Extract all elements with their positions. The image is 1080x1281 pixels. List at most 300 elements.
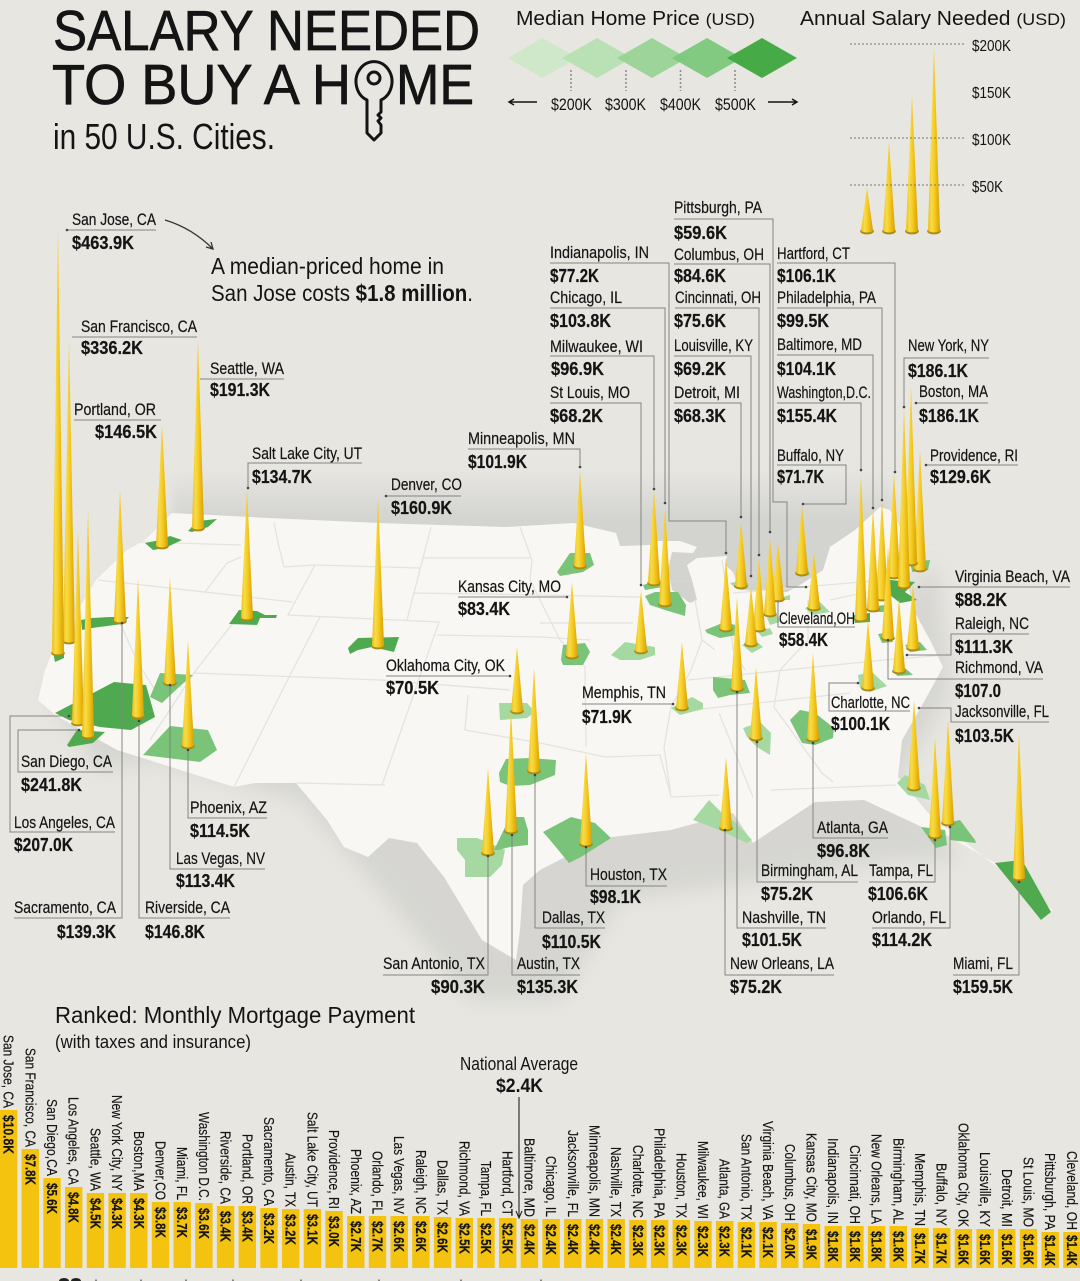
state borders [98,523,945,797]
bar: Riverside: $3.4K [217,1211,234,1242]
label: Chicago: Chicago, IL [550,288,622,307]
label: Seattle: $191.3K [210,380,270,400]
label: Kansas City [458,577,568,619]
label: national average: $2.4K [496,1076,543,1097]
bar: Los Angeles [65,1097,82,1268]
bar: Houston: $2.3K [672,1225,689,1256]
spike: Chicago [658,508,672,607]
label: New Orleans [724,829,835,997]
spike: Orlando [941,720,955,826]
bar: San Francisco: San Francisco, CA [21,1048,38,1147]
bar: Oklahoma City: $1.6K [954,1234,971,1265]
legend: annual salary needed: $100K [972,132,1011,149]
label: Richmond [887,639,1044,701]
metro areas: green price patches [53,519,1051,920]
label: Hartford: $106.1K [777,266,836,286]
spike: Baltimore [866,508,880,612]
label: Richmond: Richmond, VA [955,658,1044,677]
bar: Richmond: Richmond, VA [455,1141,472,1216]
label: Oklahoma City [386,656,511,698]
label: San Jose [66,210,157,253]
bar: Austin: $3.2K [282,1214,299,1245]
bar: Indianapolis: Indianapolis, IN [824,1138,841,1224]
label: Milwaukee [550,337,655,490]
label: Cleveland [778,600,855,650]
bar: San Antonio: San Antonio, TX [737,1134,754,1220]
bar: Las Vegas: Las Vegas, NV [390,1136,407,1214]
label: Miami: Miami, FL [953,954,1013,973]
bar: Nashville: $2.4K [607,1224,624,1255]
label: San Francisco: San Francisco, CA [81,317,198,336]
label: Dallas [534,774,605,952]
label: Chicago: $103.8K [550,311,611,331]
bar: San Antonio: $2.1K [737,1227,754,1258]
bar: San Jose [0,1035,17,1268]
bar: Boston: Boston,MA [130,1131,147,1191]
bar: Raleigh [412,1150,430,1268]
bar: Virginia Beach: Virginia Beach, VA [759,1121,776,1220]
label: Louisville [674,336,753,577]
bar: Louisville: $1.6K [976,1234,993,1265]
bar: San Diego: San Diego,CA [43,1099,60,1176]
spike: Sacramento [113,490,127,624]
label: Los Angeles: $207.0K [14,835,73,855]
title: ME [396,53,474,117]
label: Phoenix: $114.5K [190,821,250,841]
bar: Louisville: Louisville, KY [976,1152,993,1227]
label: Tampa: Tampa, FL [869,861,933,880]
spike: Riverside [131,578,145,719]
label: Tampa [868,839,936,904]
bar: Birmingham: $1.8K [889,1231,906,1262]
label: San Diego: San Diego, CA [21,752,113,771]
label: Milwaukee: Milwaukee, WI [550,337,643,356]
bar: Hartford [499,1151,516,1268]
label: Providence: Providence, RI [930,446,1018,465]
label: Memphis [582,683,674,727]
bar: Richmond: $2.5K [455,1223,472,1254]
bar: Milwaukee: Milwaukee, WI [694,1141,711,1219]
bar: San Diego [43,1099,61,1268]
label: Birmingham: Birmingham, AL [761,861,858,880]
label: San Jose: $463.9K [72,233,134,253]
bar: San Francisco: $7.8K [21,1154,38,1185]
legend: annual salary needed [800,8,1066,234]
bar: Miami: $3.7K [173,1207,190,1238]
spike: Boston [904,387,918,566]
bar: Portland: $3.4K [238,1211,255,1242]
label: Kansas City: $83.4K [458,599,510,619]
label: Louisville: Louisville, KY [674,336,753,355]
label: Portland: Portland, OR [74,400,156,419]
spike: St Louis [634,590,648,654]
label: Salt Lake City: Salt Lake City, UT [252,444,362,463]
spike: Memphis [675,642,689,711]
spike: Minneapolis [573,470,587,569]
bar: Tampa: Tampa, FL [477,1161,494,1216]
label: Portland [74,400,161,442]
label: Jacksonville: Jacksonville, FL [955,702,1049,721]
spike: Oklahoma City [510,647,524,714]
legend: median home price [508,8,797,114]
bar: Denver: Denver,CO [152,1141,168,1200]
label: Houston: $98.1K [590,887,641,907]
legend: annual salary needed: $200K [972,38,1011,55]
label: Cleveland: $58.4K [779,630,828,650]
bar: Jacksonville: $2.4K [564,1224,581,1255]
bar: Cleveland: $1.4K [1063,1235,1080,1266]
label: Virginia Beach [918,567,1071,610]
label: Charlotte: $100.1K [831,714,890,734]
label: St Louis: St Louis, MO [550,383,630,402]
bar: Cincinnati: $1.8K [846,1231,863,1262]
label: national average [460,1054,578,1097]
label: Indianapolis: Indianapolis, IN [550,243,649,262]
label: Phoenix [187,749,267,841]
spike: Kansas City [565,582,579,659]
spike: Hartford [887,473,901,579]
label: Detroit [674,383,742,518]
bar: Minneapolis: Minneapolis, MN [586,1125,602,1217]
bar: Riverside [217,1131,234,1268]
label: Sacramento [14,622,123,942]
bar: Tampa [477,1161,495,1268]
spike: Tampa [928,738,942,839]
bar: Jacksonville: Jacksonville, FL [564,1130,581,1217]
label: Buffalo: $71.7K [777,467,824,487]
label: Riverside: $146.8K [145,922,205,942]
spike: Detroit [734,522,748,589]
label: Columbus: $84.6K [674,266,726,286]
bar: San Diego: $5.6K [43,1183,60,1214]
bar: Indianapolis: $1.8K [824,1231,841,1262]
bar: Minneapolis: $2.4K [586,1224,602,1255]
label: Nashville: Nashville, TN [742,908,826,927]
spike: Dallas [527,668,541,774]
label: Orlando: $114.2K [872,930,932,950]
bar: Atlanta [716,1159,733,1268]
map: United States [38,507,1053,960]
spike: Columbus [763,537,777,617]
label: New York [903,336,989,408]
spike: Pittsburgh [771,543,785,602]
chart heading: ranked mortgage: (with taxes and insurance) [55,1032,251,1052]
label: Atlanta: Atlanta, GA [817,818,889,837]
bar: Raleigh: Raleigh, NC [412,1150,429,1214]
spike: San Jose [51,230,65,656]
label: Washington: $155.4K [777,406,837,426]
subtitle: in 50 U.S. Cities. [53,116,275,157]
spike: Philadelphia [875,500,889,601]
label: San Antonio [383,855,489,997]
label: San Antonio: $90.3K [431,977,485,997]
bar: Los Angeles: $4.8K [65,1192,82,1223]
label: Buffalo [777,446,846,505]
label: Charlotte [829,682,910,734]
bar: Houston [672,1153,690,1268]
bar: Dallas [434,1160,451,1268]
label: Portland: $146.5K [95,422,157,442]
chart heading: ranked mortgage [55,1002,416,1052]
bar: St Louis: $1.6K [1020,1234,1036,1265]
spike: Louisville [744,587,758,647]
label: Columbus: Columbus, OH [674,245,764,264]
label: San Francisco: $336.2K [81,338,143,358]
label: Providence [925,446,1018,487]
legend: median home price: $300K [605,95,647,114]
spike: Buffalo [795,505,809,576]
label: Baltimore: Baltimore, MD [777,335,862,354]
bar: Virginia Beach: $2.1K [759,1227,776,1258]
bar: Chicago: $2.4K [542,1224,559,1255]
label: Cincinnati: Cincinnati, OH [675,288,761,307]
bar: Charlotte: Charlotte, NC [629,1145,646,1218]
spike: Charlotte [861,620,875,691]
bar: Boston: $4.3K [130,1198,147,1229]
label: Seattle [200,359,285,400]
bar: Memphis: Memphis, TN [911,1153,928,1226]
label: Miami [953,881,1020,997]
bar: San Jose: $10.8K [0,1115,17,1154]
label: Pittsburgh: $59.6K [674,223,727,243]
spike: Birmingham [749,667,763,741]
label: Cincinnati [674,288,761,556]
bar: Nashville [607,1147,625,1268]
label: San Francisco [72,317,198,358]
bar: Providence [325,1130,343,1268]
gray land to the north [172,470,905,610]
spike: Raleigh [892,598,906,674]
label: San Diego [18,729,113,795]
bar: Denver [152,1141,169,1268]
label: Birmingham: $75.2K [761,884,813,904]
bar: Tampa: $2.5K [477,1223,494,1254]
label: Minneapolis [468,429,581,472]
label: Philadelphia: Philadelphia, PA [777,288,877,307]
bar: Atlanta: Atlanta, GA [716,1159,733,1219]
label: Tampa: $106.6K [868,884,928,904]
arrow: callout pointer [165,220,213,249]
label: Salt Lake City [247,444,362,489]
label: Jacksonville [918,702,1049,746]
label: Austin: Austin, TX [517,954,580,973]
bar: Portland: Portland, OR [238,1134,255,1204]
bar: Pittsburgh: Pittsburgh, PA [1041,1153,1058,1230]
label: Oklahoma City: $70.5K [386,678,439,698]
label: Washington: Washington,D.C. [777,383,871,402]
bar: Salt Lake City: Salt Lake City, UT [303,1112,320,1207]
arrow: national average [516,1097,522,1218]
bar: Orlando: $2.7K [368,1221,386,1252]
label: Las Vegas: $113.4K [176,871,235,891]
bar: Riverside: Riverside, CA [217,1131,234,1204]
label: Memphis: Memphis, TN [582,683,666,702]
spike: Las Vegas [163,577,177,686]
bar: Las Vegas: $2.6K [390,1221,407,1252]
footer strip, cropped source line [59,1278,542,1281]
bar: Baltimore: Baltimore, MD [520,1138,537,1217]
label: St Louis: $68.2K [550,406,603,426]
label: Seattle: Seattle, WA [210,359,285,378]
label: Boston: $186.1K [919,406,979,426]
bar: Phoenix: $2.7K [347,1221,364,1252]
callout: San Jose: A median-priced home in [211,253,444,279]
legend: median home price: $400K [660,95,702,114]
bar: Salt Lake City: $3.1K [303,1214,320,1245]
bar: San Jose: San Jose, CA [0,1035,17,1108]
bar: Austin: Austin, TX [282,1153,299,1207]
label: Memphis: $71.9K [582,707,632,727]
legend: annual salary needed: $50K [972,179,1003,196]
bar: Detroit: $1.6K [998,1234,1015,1265]
spike: Richmond [881,547,895,641]
bar: Pittsburgh: $1.4K [1041,1235,1058,1266]
spike: Cincinnati [752,558,766,632]
callout: San Jose [211,253,473,306]
bar: Sacramento: $3.2K [260,1213,277,1244]
spike: Jacksonville [907,700,921,791]
label: Dallas: Dallas, TX [542,908,605,927]
label: San Antonio: San Antonio, TX [383,954,485,973]
label: Dallas: $110.5K [542,932,601,952]
bar: Memphis: $1.7K [911,1233,928,1264]
label: Providence: $129.6K [930,467,991,487]
bar: Kansas City: Kansas City, MO [802,1133,820,1222]
label: Washington [777,383,871,471]
legend: median home price: $500K [715,95,757,114]
bar: Dallas: $2.6K [434,1222,451,1253]
bar: Charlotte: $2.3K [629,1225,646,1256]
label: Hartford: Hartford, CT [777,244,850,263]
bar: Washington: $3.6K [195,1208,212,1239]
bar: Hartford: Hartford, CT [499,1151,516,1216]
bar: New York City: New York City, NY [108,1095,125,1191]
label: New York: $186.1K [908,361,968,381]
label: Phoenix: Phoenix, AZ [190,798,267,817]
bar: Buffalo: Buffalo, NY [933,1163,950,1226]
label: Raleigh [906,614,1029,657]
label: national average: National Average [460,1054,578,1074]
bar: Phoenix: Phoenix, AZ [347,1149,364,1214]
label: Riverside [138,720,231,942]
icon: key as letter O [356,62,392,140]
bar: Chicago [542,1156,560,1268]
label: Milwaukee: $96.9K [551,359,604,379]
bar: Seattle: Seattle, WA [86,1128,103,1191]
spike: Phoenix [181,640,195,749]
label: Virginia Beach: $88.2K [955,590,1007,610]
callout: San Jose: San Jose costs $1.8 million. [211,280,473,306]
label: Riverside: Riverside, CA [145,898,231,917]
bar: Philadelphia: Philadelphia, PA [651,1128,668,1218]
label: Detroit: Detroit, MI [674,383,740,402]
label: Chicago [550,288,666,504]
bar: New York City: $4.3K [108,1198,125,1229]
label: Atlanta: $96.8K [817,841,870,861]
label: Pittsburgh [674,198,807,588]
label: Raleigh: Raleigh, NC [955,614,1029,633]
label: Hartford [777,244,896,473]
label: Austin [511,834,580,997]
spike: San Francisco [62,340,76,644]
bar: Columbus: Columbus, OH [781,1144,798,1221]
label: Orlando: Orlando, FL [872,908,946,927]
bar: Buffalo [933,1163,950,1268]
label: Orlando [872,826,951,950]
label: Buffalo: Buffalo, NY [777,446,844,465]
label: Philadelphia: $99.5K [777,311,829,331]
label: Kansas City: Kansas City, MO [458,577,561,596]
spike: San Antonio [481,768,495,856]
bar: Baltimore: $2.4K [520,1224,537,1255]
bar: Providence: $3.0K [325,1216,342,1247]
label: Indianapolis: $77.2K [550,266,599,286]
label: Philadelphia [777,288,883,501]
legend: annual salary needed: $150K [972,85,1011,102]
spike: Cleveland [807,553,821,611]
bar: Columbus: $2.0K [781,1228,798,1259]
label: Raleigh: $111.3K [955,637,1013,657]
bar: Birmingham: Birmingham, AL [889,1138,906,1224]
bar: Detroit: Detroit, MI [998,1169,1015,1227]
bar: Sacramento [260,1117,278,1268]
label: Nashville: $101.5K [742,930,802,950]
label: Detroit: $68.3K [674,406,726,426]
label: Charlotte: Charlotte, NC [831,693,910,712]
title [52,0,480,117]
spike: Denver [371,497,385,649]
bar: Denver: $3.8K [152,1207,168,1238]
spike: Miami [1012,733,1026,881]
spike: Washington [854,475,868,622]
bar: Buffalo: $1.7K [933,1233,950,1264]
bar: Chicago: Chicago, IL [542,1156,559,1217]
label: New Orleans: $75.2K [730,977,782,997]
label: Houston [585,846,667,907]
label: Las Vegas: Las Vegas, NV [176,849,266,868]
bar: Washington: Washington D.C. [195,1112,212,1201]
label: Cleveland: Cleveland,OH [779,609,855,628]
label: Minneapolis: $101.9K [468,452,527,472]
label: Indianapolis [550,243,727,554]
label: Miami: $159.5K [953,977,1013,997]
label: Sacramento: $139.3K [57,922,116,942]
spike: Los Angeles [71,530,85,726]
bar: Cincinnati: Cincinnati, OH [846,1145,863,1224]
label: Cincinnati: $75.6K [674,311,726,331]
bar: New Orleans: $1.8K [868,1231,885,1262]
spike: Milwaukee [647,490,661,586]
bar: New Orleans: New Orleans, LA [868,1134,885,1224]
bar: Nashville: Nashville, TX [607,1147,624,1217]
bar: Boston [130,1131,148,1268]
spike: Portland [155,425,169,549]
label: St Louis [550,383,642,586]
bar: Milwaukee: $2.3K [694,1226,711,1257]
spike: Indianapolis [719,558,733,632]
label: Denver: $160.9K [391,498,452,518]
spike: Atlanta [806,653,820,742]
spike: Nashville [730,597,744,692]
label: Boston [915,382,989,426]
label: Atlanta [812,742,889,861]
bar: Phoenix [347,1149,364,1268]
label: New York: New York, NY [908,336,989,355]
legend: annual salary needed: Annual Salary Needed (USD) [800,8,1066,30]
bar: Philadelphia: $2.3K [651,1225,668,1256]
label: Boston: Boston, MA [919,382,989,401]
bar chart: monthly mortgage payment [0,1035,1080,1268]
